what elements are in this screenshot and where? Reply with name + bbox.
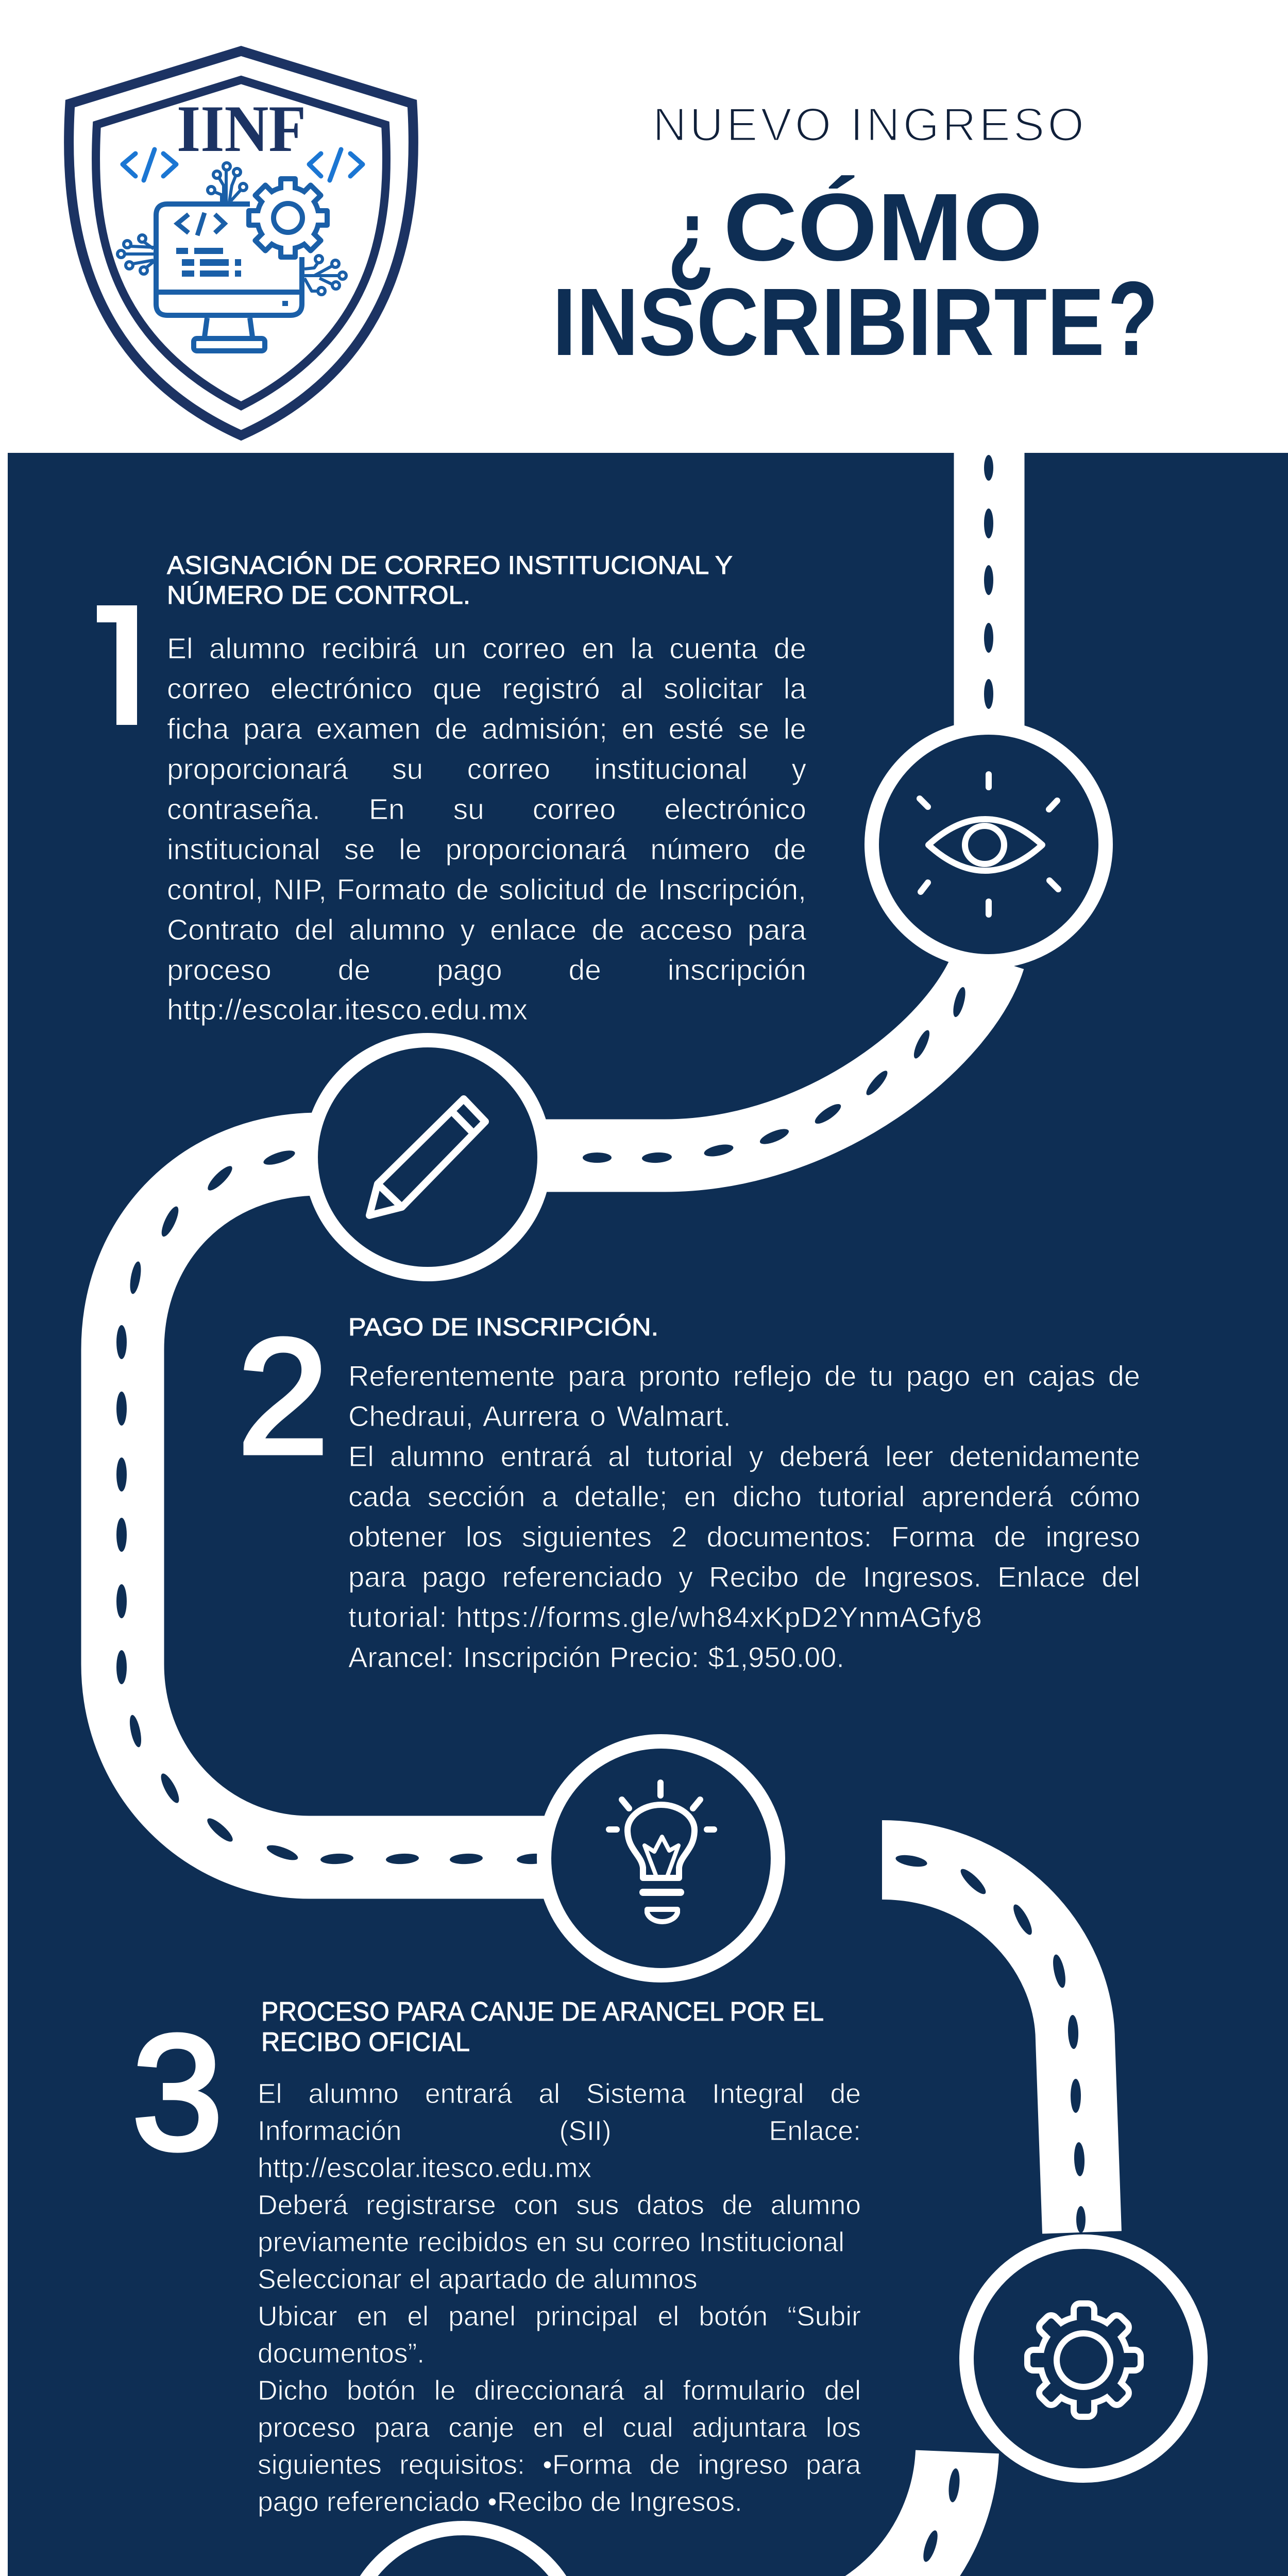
road: first stretch from top through eye to pencil bbox=[428, 453, 989, 1156]
text block: step 2 body: obtener los siguientes 2 documentos: Forma de ingreso bbox=[348, 1520, 1140, 1553]
text block: step 3 body: Deberá registrarse con sus datos de alumno bbox=[258, 2190, 861, 2221]
icon: light bulb badge bbox=[544, 1741, 778, 1975]
text block: step 3 body: siguientes requisitos: •Forma de ingreso para bbox=[258, 2449, 861, 2480]
text block: step 1 body: Contrato del alumno y enlace de acceso para bbox=[167, 913, 806, 946]
logo left code tag bbox=[123, 149, 176, 180]
step number 1: 1 bbox=[78, 577, 170, 760]
text block: step 3 body: http://escolar.itesco.edu.mx bbox=[258, 2153, 591, 2183]
icon: pencil badge bbox=[311, 1040, 545, 1274]
text block: step 3 body: pago referenciado •Recibo de Ingresos. bbox=[258, 2486, 742, 2517]
step number 2: 2 bbox=[238, 1305, 329, 1488]
text block: step 2 body: para pago referenciado y Recibo de Ingresos. Enlace del bbox=[348, 1561, 1140, 1593]
text block: step 1 body: ficha para examen de admisión; en esté se le bbox=[167, 713, 806, 745]
heading: step 1 bbox=[167, 551, 733, 609]
heading: step 3: RECIBO OFICIAL bbox=[261, 2027, 470, 2057]
logo right code tag bbox=[309, 149, 363, 180]
text block: step 2 body: tutorial: https://forms.gle/wh84xKpD2YnmAGfy8 bbox=[348, 1601, 982, 1633]
title: nuevo ingreso: NUEVO INGRESO bbox=[653, 99, 1084, 151]
road: left bend from pencil to bulb bbox=[123, 1154, 567, 1857]
text block: step 1 body: proceso de pago de inscripción bbox=[167, 954, 806, 987]
text block: step 3 body: Ubicar en el panel principal el botón “Subir bbox=[258, 2301, 861, 2332]
text block: step 3 body: documentos”. bbox=[258, 2338, 425, 2369]
title: como inscribirte: INSCRIBIRTE bbox=[552, 269, 1105, 376]
heading: step 1: ASIGNACIÓN DE CORREO INSTITUCIONAL Y bbox=[167, 551, 733, 580]
text block: step 2 body: El alumno entrará al tutorial y deberá leer detenidamente bbox=[348, 1440, 1140, 1472]
text block: step 3 body: Información (SII) Enlace: bbox=[258, 2115, 861, 2146]
text block: step 3 body bbox=[258, 2078, 861, 2517]
heading: step 2: PAGO DE INSCRIPCIÓN. bbox=[348, 1313, 658, 1341]
logo wordmark: IINF bbox=[177, 92, 306, 165]
text block: step 2 body: Referentemente para pronto reflejo de tu pago en cajas de bbox=[348, 1360, 1140, 1392]
logo inner shield bbox=[96, 80, 386, 406]
text block: step 1 body: El alumno recibirá un correo en la cuenta de bbox=[167, 632, 806, 665]
text block: step 1 body: institucional se le proporcionará número de bbox=[167, 833, 806, 866]
text block: step 1 body: proporcionará su correo institucional y bbox=[167, 753, 806, 786]
logo outer shield bbox=[69, 51, 413, 435]
road: right bend from bulb gap to gear bbox=[882, 1860, 1082, 2232]
text block: step 1 body: contraseña. En su correo electrónico bbox=[167, 793, 806, 826]
text block: step 3 body: Seleccionar el apartado de alumnos bbox=[258, 2264, 698, 2295]
text block: step 1 body bbox=[167, 632, 806, 1026]
text block: step 2 body bbox=[348, 1360, 1140, 1673]
logo circuits bbox=[117, 163, 346, 295]
step number 3: 3 bbox=[132, 2001, 223, 2184]
logo: IINF shield bbox=[69, 51, 413, 435]
title: como inscribirte: ? bbox=[1108, 260, 1158, 378]
icon: eye badge bbox=[872, 727, 1106, 961]
title: como inscribirte: CÓMO bbox=[723, 174, 1043, 281]
text block: step 2 body: Arancel: Inscripción Precio: $1,950.00. bbox=[348, 1641, 844, 1673]
text block: step 1 body: http://escolar.itesco.edu.mx bbox=[167, 993, 528, 1026]
text block: step 3 body: El alumno entrará al Sistema Integral de bbox=[258, 2078, 861, 2109]
heading: step 1: NÚMERO DE CONTROL. bbox=[167, 581, 470, 609]
heading: step 3: PROCESO PARA CANJE DE ARANCEL POR EL bbox=[261, 1997, 824, 2027]
logo monitor bbox=[156, 204, 302, 351]
text block: step 2 body: cada sección a detalle; en dicho tutorial aprenderá cómo bbox=[348, 1480, 1140, 1513]
icon: check badge bbox=[346, 2528, 580, 2576]
text block: step 1 body: control, NIP, Formato de solicitud de Inscripción, bbox=[167, 873, 806, 906]
logo gear bbox=[249, 179, 327, 257]
title: como inscribirte: ¿ bbox=[668, 177, 714, 295]
step number 1 bbox=[97, 605, 137, 725]
heading: step 3 bbox=[261, 1997, 824, 2057]
road lane dashes bbox=[116, 455, 1086, 2576]
title: como inscribirte bbox=[552, 174, 1158, 378]
text block: step 2 body: Chedraui, Aurrera o Walmart. bbox=[348, 1400, 731, 1432]
text block: step 3 body: proceso para canje en el cual adjuntara los bbox=[258, 2412, 861, 2443]
text block: step 3 body: previamente recibidos en su correo Institucional bbox=[258, 2227, 844, 2258]
road: bend from gear to check bbox=[464, 2452, 957, 2576]
icon: gear badge bbox=[967, 2242, 1200, 2476]
text block: step 3 body: Dicho botón le direccionará al formulario del bbox=[258, 2375, 861, 2406]
text block: step 1 body: correo electrónico que registró al solicitar la bbox=[167, 672, 806, 705]
